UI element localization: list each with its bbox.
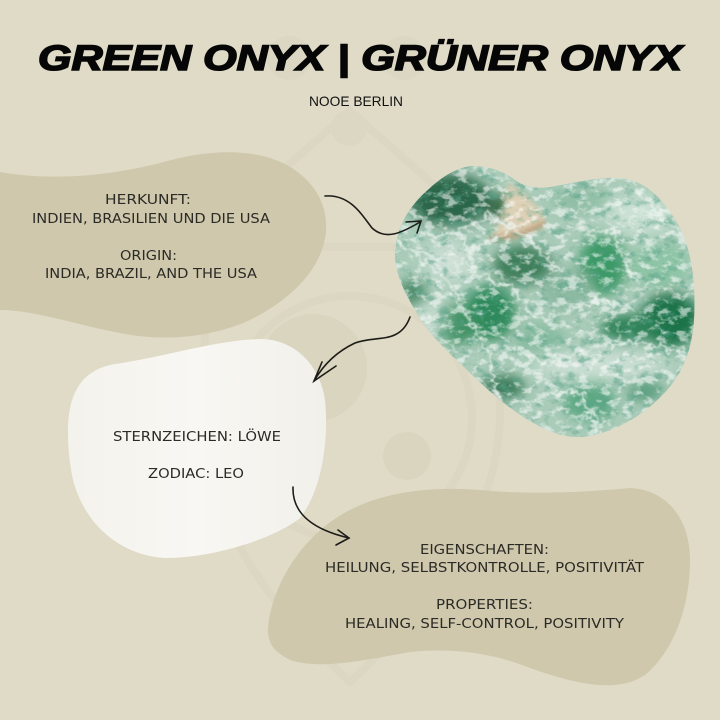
zodiac text (113, 427, 281, 482)
origin text: INDIEN, BRASILIEN UND DIE USA (32, 211, 271, 227)
stone colour patches (399, 174, 700, 422)
properties text (325, 542, 645, 632)
zodiac text: ZODIAC: LEO (148, 466, 244, 482)
properties text: EIGENSCHAFTEN: (420, 542, 549, 558)
origin text: HERKUNFT: (105, 192, 191, 208)
stone ridge veins (397, 190, 690, 436)
arrow: stone to zodiac (314, 317, 410, 381)
panel: zodiac (68, 339, 326, 558)
subtitle: NOOE BERLIN (309, 93, 403, 109)
image: green onyx stone (394, 166, 694, 438)
title: GREEN ONYX | GRÜNER ONYX (38, 39, 685, 78)
arrow: origin to stone (325, 196, 421, 235)
origin text: ORIGIN: (120, 248, 177, 264)
zodiac text: STERNZEICHEN: LÖWE (113, 427, 281, 445)
properties text: HEALING, SELF-CONTROL, POSITIVITY (345, 616, 625, 632)
stone tan vein (490, 182, 545, 238)
panel: origin (0, 152, 326, 338)
watermark symbol (200, 36, 500, 682)
arrow: zodiac to properties (293, 487, 349, 545)
properties text: HEILUNG, SELBSTKONTROLLE, POSITIVITÄT (325, 558, 645, 576)
panel: properties (268, 488, 690, 685)
origin text: INDIA, BRAZIL, AND THE USA (45, 266, 258, 282)
origin text (32, 192, 271, 282)
properties text: PROPERTIES: (436, 597, 533, 613)
stone pale areas (416, 197, 674, 375)
